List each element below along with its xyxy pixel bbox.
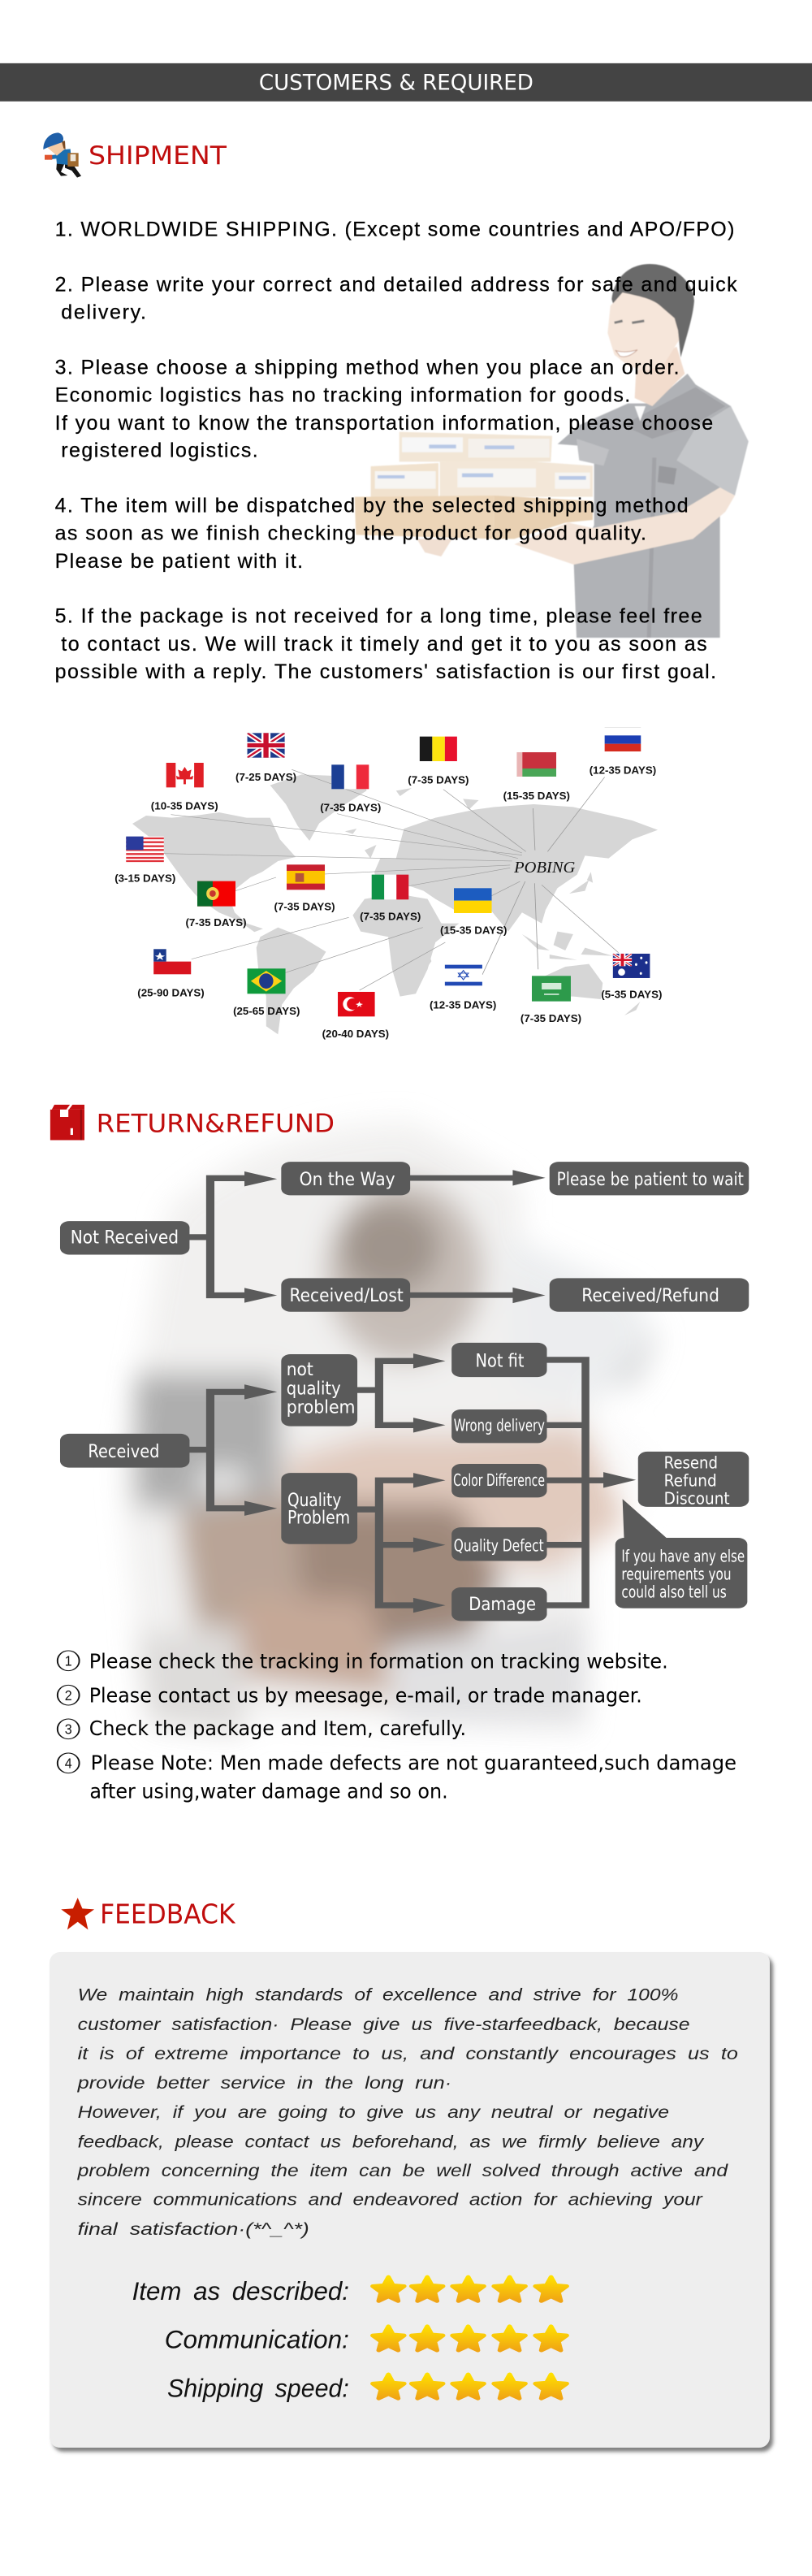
rating: communication <box>165 2325 567 2354</box>
node: wrong delivery: Wrong delivery <box>454 1416 545 1435</box>
node: received/lost <box>281 1278 410 1312</box>
node: resend refund discount: Discount <box>664 1489 730 1509</box>
node: quality problem <box>281 1473 357 1544</box>
label: Israel days: (12-35 DAYS) <box>430 1000 496 1011</box>
flag: France <box>331 764 369 789</box>
man's hair <box>611 264 694 357</box>
flag: Belgium <box>420 737 457 761</box>
icon: red box <box>50 1105 84 1140</box>
flowchart <box>60 1162 749 1621</box>
flag: Spain <box>287 864 325 890</box>
feedback message: problem concerning the item can be well solved through active and <box>77 2161 729 2180</box>
feedback message: feedback, please contact us beforehand, as we firmly believe any <box>78 2132 705 2152</box>
label: Chile days: (25-90 DAYS) <box>137 988 205 999</box>
shipping instructions text: 2. Please write your correct and detailed address for safe and quick <box>55 273 737 296</box>
flag: Canada <box>166 763 204 787</box>
shipping instructions text: Please be patient with it. <box>55 550 303 573</box>
rating: shipping speed <box>167 2374 567 2402</box>
heading text: SHIPMENT <box>89 141 227 171</box>
flag: Australia <box>613 954 650 978</box>
node: not received <box>60 1221 189 1254</box>
node: quality defect <box>451 1527 547 1561</box>
label: Belgium days: (7-35 DAYS) <box>408 775 469 786</box>
feedback message: We maintain high standards of excellence and strive for 100% <box>78 1985 679 2005</box>
node: received/refund: Received/Refund <box>581 1285 719 1306</box>
note 4: 4 <box>65 1756 72 1772</box>
rating: item as described <box>132 2277 567 2305</box>
node: received/refund <box>550 1278 749 1312</box>
label: Brazil days: (25-65 DAYS) <box>233 1007 300 1017</box>
note 3: 3 <box>65 1721 72 1738</box>
map: continents <box>132 774 658 1034</box>
note 2: 2 <box>65 1687 72 1704</box>
stacked boxes <box>355 432 593 539</box>
node: not quality problem: problem <box>287 1397 356 1418</box>
label: Saudi days: (7-35 DAYS) <box>520 1014 581 1024</box>
section heading: return & refund <box>50 1105 335 1140</box>
panel: feedback <box>50 1952 770 2448</box>
feedback message: final satisfaction·(*^_^*) <box>78 2219 309 2239</box>
world map with flags and delivery times <box>114 727 662 1040</box>
label: Spain days: (7-35 DAYS) <box>274 902 335 913</box>
feedback message: sincere communications and endeavored action for achieving your <box>78 2190 703 2210</box>
photo: delivery man with boxes <box>355 264 749 638</box>
rating: communication: Communication: <box>165 2325 349 2354</box>
label: UK days: (7-25 DAYS) <box>235 773 296 783</box>
flag: Brazil <box>248 968 286 994</box>
feedback message: customer satisfaction· Please give us five-starfeedback, because <box>78 2015 690 2034</box>
callout: other requirements: could also tell us <box>621 1582 727 1601</box>
man's shirt <box>558 374 749 638</box>
node: please be patient <box>550 1162 749 1195</box>
note 3 <box>58 1717 466 1740</box>
connectors and arrows <box>187 1170 636 1613</box>
label: Canada days: (10-35 DAYS) <box>151 801 218 812</box>
label: Australia days: (5-35 DAYS) <box>601 989 662 1001</box>
node: on the way: On the Way <box>300 1169 395 1190</box>
note 4: after using,water damage and so on. <box>89 1779 448 1803</box>
shipping instructions text: 1. WORLDWIDE SHIPPING. (Except some countries and APO/FPO) <box>55 219 734 241</box>
flag: Saudi Arabia <box>532 976 571 1002</box>
node: quality problem: Quality <box>287 1490 341 1511</box>
man's neck <box>635 347 685 406</box>
origin label: POBING <box>513 859 575 877</box>
node: resend refund discount: Refund <box>664 1471 717 1491</box>
flag: Russia <box>605 727 641 751</box>
node: resend refund discount: Resend <box>664 1453 718 1473</box>
numbered notes <box>58 1649 736 1803</box>
shipping instructions text: possible with a reply. The customers' satisfaction is our first goal. <box>55 660 716 683</box>
node: received/lost: Received/Lost <box>290 1285 404 1306</box>
section heading: feedback <box>61 1898 236 1930</box>
shipping instructions text: 3. Please choose a shipping method when you place an order. <box>55 356 680 379</box>
flag: Chile <box>153 949 191 974</box>
node: wrong delivery <box>451 1409 547 1443</box>
label: France days: (7-35 DAYS) <box>320 803 381 814</box>
node: not fit <box>451 1343 547 1377</box>
shipping instructions text: delivery. <box>61 301 146 324</box>
node: resend refund discount <box>638 1452 749 1509</box>
node: on the way <box>281 1162 410 1195</box>
callout: other requirements <box>615 1499 747 1608</box>
header banner <box>0 63 812 102</box>
node: received <box>60 1434 189 1468</box>
flag: Belarus <box>517 752 556 777</box>
shipping instructions text: to contact us. We will track it timely and get it to you as soon as <box>61 633 707 656</box>
node: not quality problem <box>281 1354 357 1427</box>
feedback message: it is of extreme importance to us, and constantly encourages us to <box>78 2045 738 2063</box>
flag: Turkey <box>338 992 375 1016</box>
photo: blurred handshake background <box>122 1123 664 1734</box>
label: Portugal days: (7-35 DAYS) <box>185 918 247 929</box>
node: not quality problem: not <box>287 1359 313 1380</box>
node: quality problem: Problem <box>287 1508 350 1528</box>
man's face <box>607 292 689 371</box>
icon: running courier <box>43 132 81 178</box>
forearm and hands <box>514 487 735 565</box>
feedback message <box>77 1985 738 2239</box>
icon: red star <box>61 1898 94 1929</box>
feedback message: provide better service in the long run· <box>77 2073 451 2093</box>
flag: Portugal <box>197 881 235 907</box>
panel background <box>50 1952 770 2448</box>
label: Ukraine days: (15-35 DAYS) <box>440 925 507 937</box>
node: quality defect: Quality Defect <box>454 1536 544 1555</box>
shipping instructions text: as soon as we finish checking the product for good quality. <box>55 522 646 545</box>
flag: USA <box>126 837 164 862</box>
heading text: RETURN&REFUND <box>97 1108 335 1138</box>
shipping instructions text: If you want to know the transportation information, please choose <box>55 412 713 435</box>
flag: Israel <box>445 963 482 987</box>
label: Turkey days: (20-40 DAYS) <box>322 1029 389 1040</box>
section heading: shipment <box>43 132 227 178</box>
label: Belarus days: (15-35 DAYS) <box>503 791 570 802</box>
node: damage <box>451 1587 547 1621</box>
node: not quality problem: quality <box>287 1379 341 1399</box>
note 4 <box>58 1751 736 1803</box>
node: not received: Not Received <box>71 1227 179 1248</box>
heading text: FEEDBACK <box>100 1899 236 1930</box>
shipping instructions text: 5. If the package is not received for a long time, please feel free <box>55 605 702 628</box>
route lines <box>164 769 619 990</box>
label: USA days: (3-15 DAYS) <box>114 873 175 885</box>
shipping instructions text: Economic logistics has no tracking information for goods. <box>55 384 630 407</box>
node: damage: Damage <box>469 1594 536 1615</box>
rating: item as described: Item as described: <box>132 2277 349 2305</box>
rating: shipping speed: Shipping speed: <box>167 2374 349 2402</box>
node: not fit: Not fit <box>476 1351 525 1371</box>
node: received: Received <box>88 1441 159 1462</box>
flag: United Kingdom <box>248 733 285 758</box>
feedback message: However, if you are going to give us any neutral or negative <box>78 2102 669 2122</box>
node: color difference: Color Difference <box>453 1470 545 1490</box>
banner title: CUSTOMERS & REQUIRED <box>259 71 533 96</box>
node: color difference <box>451 1464 547 1497</box>
label: Italy days: (7-35 DAYS) <box>360 911 421 923</box>
shipping instructions text: 4. The item will be dispatched by the selected shipping method <box>55 494 689 517</box>
flag: Ukraine <box>454 888 492 913</box>
note 1: 1 <box>65 1653 72 1669</box>
shipping instructions text: registered logistics. <box>61 439 258 461</box>
label: Russia days: (12-35 DAYS) <box>590 765 656 777</box>
shipping instructions text <box>55 219 737 683</box>
flag: Italy <box>372 875 408 899</box>
